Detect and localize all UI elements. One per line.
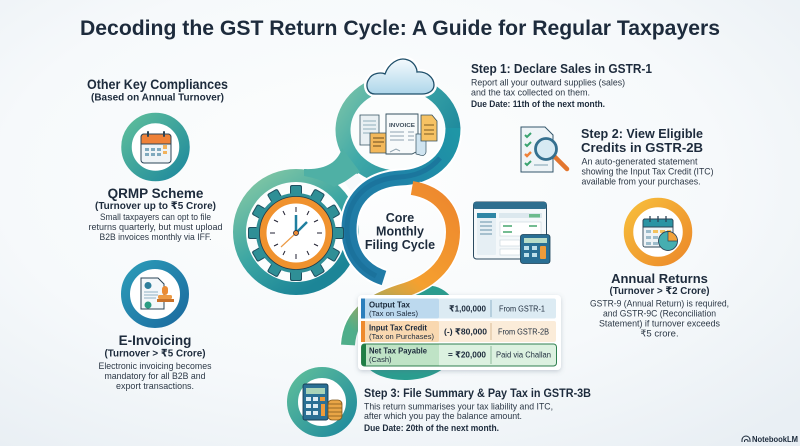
row: input tax credit: From GSTR-2B [498,328,549,336]
panel: step 3: Due Date: 20th of the next month. [364,423,499,433]
row: output tax: From GSTR-1 [499,304,545,314]
panel: step 3: Step 3: File Summary & Pay Tax in GSTR-3B [364,388,591,400]
panel: e-invoicing: mandatory for all B2B and [104,371,206,382]
step 2 text [581,126,714,188]
step 1 text: Due Date: 11th of the next month. [471,99,605,109]
row: output tax: (Tax on Sales) [369,309,419,318]
step 2 text: Credits in GSTR-2B [581,140,703,155]
panel: e-invoicing: Electronic invoicing becomes [98,361,212,372]
notebooklm watermark: NotebookLM [752,435,798,444]
icon: invoice and receipts: INVOICE [389,123,415,129]
title: Decoding the GST Return Cycle: A Guide for Regular Taxpayers [80,17,720,40]
panel: QRMP scheme: returns quarterly, but must upload [88,222,222,233]
icon: stamped document [126,264,184,324]
step 1 text [471,62,652,109]
heading: other key compliances: (Based on Annual Turnover) [91,92,224,104]
panel: QRMP scheme: Small taxpayers can opt to file [100,212,211,223]
center label: core monthly filing cycle: Monthly [376,224,424,238]
panel: annual returns: (Turnover > ₹2 Crore) [610,285,710,297]
row: input tax credit: (Tax on Purchases) [369,332,434,341]
chart: core filing cycle ribbons [240,82,453,380]
teal arcs behind table [368,286,452,380]
gear ring [240,176,352,288]
orange band [348,190,453,345]
blue band [349,128,453,278]
center label: core monthly filing cycle: Filing Cycle [365,238,435,252]
panel: e-invoicing: (Turnover > ₹5 Crore) [104,348,206,360]
icon: calculator and coins [292,372,352,432]
row: output tax [361,298,556,318]
row: input tax credit: Input Tax Credit [369,324,427,332]
top ring [343,82,453,178]
panel: annual returns: and GSTR-9C (Reconciliation [603,308,716,320]
row: net tax payable: Net Tax Payable [369,346,428,356]
center label: core monthly filing cycle [365,211,435,252]
row: output tax: ₹1,00,000 [449,304,486,314]
row: net tax payable [362,344,556,366]
icon: cloud outline [367,59,434,94]
icon: checklist with magnifier [521,127,567,172]
panel: QRMP scheme: (Turnover up to ₹5 Crore) [95,200,216,212]
step 2 text: An auto-generated statement [582,156,698,168]
step 1 text: Step 1: Declare Sales in GSTR-1 [471,62,652,76]
row: input tax credit: (-) ₹80,000 [444,326,487,336]
step 2 text: showing the Input Tax Credit (ITC) [582,166,714,178]
panel: e-invoicing [98,264,212,392]
panel: e-invoicing: E-Invoicing [119,333,191,348]
row: input tax credit [361,321,556,342]
panel: e-invoicing: export transactions. [116,381,194,392]
panel: annual returns: GSTR-9 (Annual Return) is required, [590,298,729,310]
icon: portal window and calculator [474,202,550,264]
neck connecting gear and top ring [304,148,360,187]
heading: other key compliances [87,77,228,104]
row: net tax payable: Paid via Challan [496,350,551,360]
icon: gear and clock [248,185,344,281]
panel: tax calculation table [358,295,561,370]
panel: annual returns: ₹5 crore. [640,328,679,340]
panel: annual returns [590,202,729,340]
step 1 text: and the tax collected on them. [471,88,590,98]
icon: invoice and receipts [360,114,437,156]
icon: calendar with pie [628,202,688,262]
step 2 text: Step 2: View Eligible [581,126,703,141]
panel: QRMP scheme: B2B invoices monthly via IFF. [100,232,212,243]
icon: calendar [126,118,184,176]
panel: step 3: after which you pay the balance amount. [364,411,522,422]
step 2 text: available from your purchases. [582,176,700,188]
row: output tax: Output Tax [369,300,411,310]
row: net tax payable: = ₹20,000 [448,350,486,360]
panel: step 3: This return summarises your tax liability and ITC, [364,402,553,412]
panel: QRMP scheme: QRMP Scheme [108,186,204,201]
panel: step 3 [292,372,591,433]
heading: other key compliances: Other Key Compliances [87,77,228,92]
center label: core monthly filing cycle: Core [386,211,414,225]
white bridge [344,173,363,191]
panel: annual returns: Statement) if turnover exceeds [599,318,720,330]
step 1 text: Report all your outward supplies (sales) [471,78,625,88]
panel: QRMP scheme [88,118,222,243]
row: net tax payable: (Cash) [369,355,392,364]
icon: cloud [367,59,434,94]
panel: annual returns: Annual Returns [611,271,708,286]
